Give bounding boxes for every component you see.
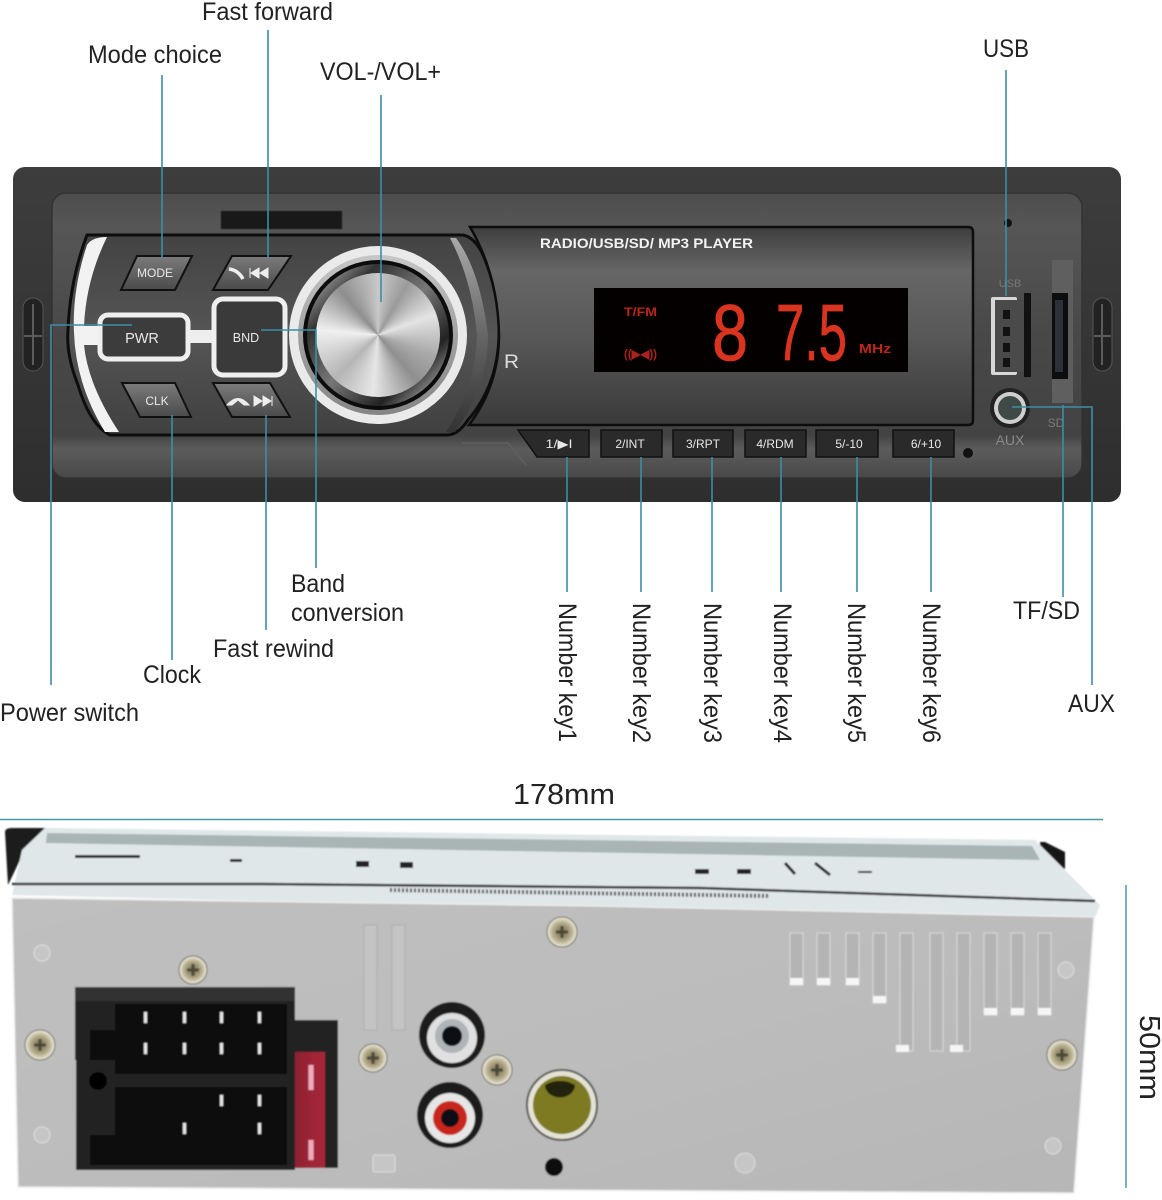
callout: band conversion: conversion — [291, 599, 404, 627]
key 6: 6/+10 — [911, 437, 942, 451]
frequency unit: MHz — [859, 341, 892, 356]
radio front unit — [13, 167, 1121, 502]
black front corners — [5, 828, 48, 885]
callout: usb: USB — [983, 35, 1029, 63]
plate left embossed slots — [364, 925, 405, 1030]
black right corner — [1040, 842, 1065, 869]
yellow video socket — [527, 1070, 597, 1140]
key 2: 2/INT — [615, 437, 645, 451]
key 1 — [518, 430, 589, 457]
callout: band conversion — [261, 330, 404, 627]
power button: PWR — [125, 331, 159, 347]
key 5: 5/-10 — [835, 437, 863, 451]
callout: aux: AUX — [1068, 690, 1115, 718]
key 3: 3/RPT — [686, 437, 721, 451]
rear view photo of unit — [5, 828, 1100, 1193]
stereo indicator: ((▶◀)) — [624, 347, 657, 361]
volume knob — [289, 246, 467, 424]
power button — [100, 315, 188, 359]
mode button — [121, 256, 192, 290]
chassis grey strip — [46, 833, 1040, 860]
band indicator: T/FM — [624, 305, 657, 319]
plate bumps — [34, 945, 1074, 1173]
aux label: AUX — [996, 432, 1025, 448]
callout: mode choice: Mode choice — [88, 41, 222, 69]
rds logo: R — [504, 352, 519, 373]
rca socket white — [419, 1002, 485, 1068]
clock button: CLK — [145, 394, 169, 408]
band button: BND — [233, 331, 259, 345]
usb port — [991, 293, 1031, 377]
model heading: RADIO/USB/SD/ MP3 PLAYER — [540, 235, 753, 251]
lower trim ridge — [462, 443, 526, 465]
mounting hole — [545, 1158, 563, 1176]
panel: control cluster — [68, 235, 499, 435]
callout: fast rewind: Fast rewind — [213, 635, 334, 663]
icon: right latch — [1093, 298, 1112, 371]
panel: outer housing — [13, 167, 1121, 502]
callout: number key 4: Number key4 — [768, 603, 796, 743]
callout: number key 6: Number key6 — [917, 603, 945, 743]
key 3 — [673, 430, 733, 457]
callout: aux — [1012, 407, 1115, 718]
LED display — [594, 288, 908, 377]
icon: left latch — [23, 298, 43, 371]
usb label: USB — [999, 278, 1021, 290]
fuse block — [295, 1020, 338, 1168]
vent highlights — [790, 978, 1051, 1052]
frequency digit: 8 — [712, 288, 748, 377]
chassis vent teeth — [390, 890, 770, 896]
chassis slit — [12, 884, 1095, 901]
card slot cover — [221, 211, 342, 229]
mic hole — [1004, 219, 1012, 227]
frequency digits: 7.5 — [776, 288, 847, 377]
callout: band conversion: Band — [291, 570, 345, 598]
key 4 — [745, 430, 806, 457]
aux jack — [990, 388, 1030, 428]
band button — [214, 299, 285, 375]
callout: clock: Clock — [143, 661, 201, 689]
rca socket red — [417, 1082, 483, 1148]
callout: power switch — [0, 325, 139, 727]
wiring connector — [75, 987, 295, 1170]
rear metal plate — [12, 898, 1094, 1193]
white bridge — [190, 330, 214, 343]
key 1: 1/▶I — [546, 437, 572, 451]
callout: power switch: Power switch — [0, 699, 139, 727]
chassis top — [12, 828, 1100, 920]
callout: tf/sd: TF/SD — [1013, 597, 1080, 625]
callout: number key 2: Number key2 — [627, 603, 655, 743]
clock button — [122, 383, 191, 417]
panel: faceplate — [52, 193, 1082, 478]
chassis holes — [75, 855, 872, 875]
key 4: 4/RDM — [756, 437, 794, 451]
number buttons — [518, 430, 954, 457]
reset hole — [963, 448, 973, 458]
fast rewind button — [213, 383, 290, 417]
callout: number key 1: Number key1 — [553, 603, 581, 742]
key 6 — [893, 430, 954, 457]
key 5 — [816, 430, 878, 457]
callout: volume: VOL-/VOL+ — [320, 58, 441, 86]
key 2 — [601, 430, 662, 457]
fast forward button — [213, 256, 291, 290]
sd label: SD — [1048, 416, 1065, 430]
panel: display bezel — [469, 227, 973, 425]
screws — [25, 917, 1077, 1085]
callout: number key 5: Number key5 — [842, 603, 870, 743]
mode button: MODE — [137, 266, 173, 280]
dimension: width: 178mm — [513, 779, 615, 811]
callout: number key 3: Number key3 — [698, 603, 726, 743]
plate right vent slots — [790, 933, 1051, 1051]
sd slot — [1052, 260, 1073, 403]
